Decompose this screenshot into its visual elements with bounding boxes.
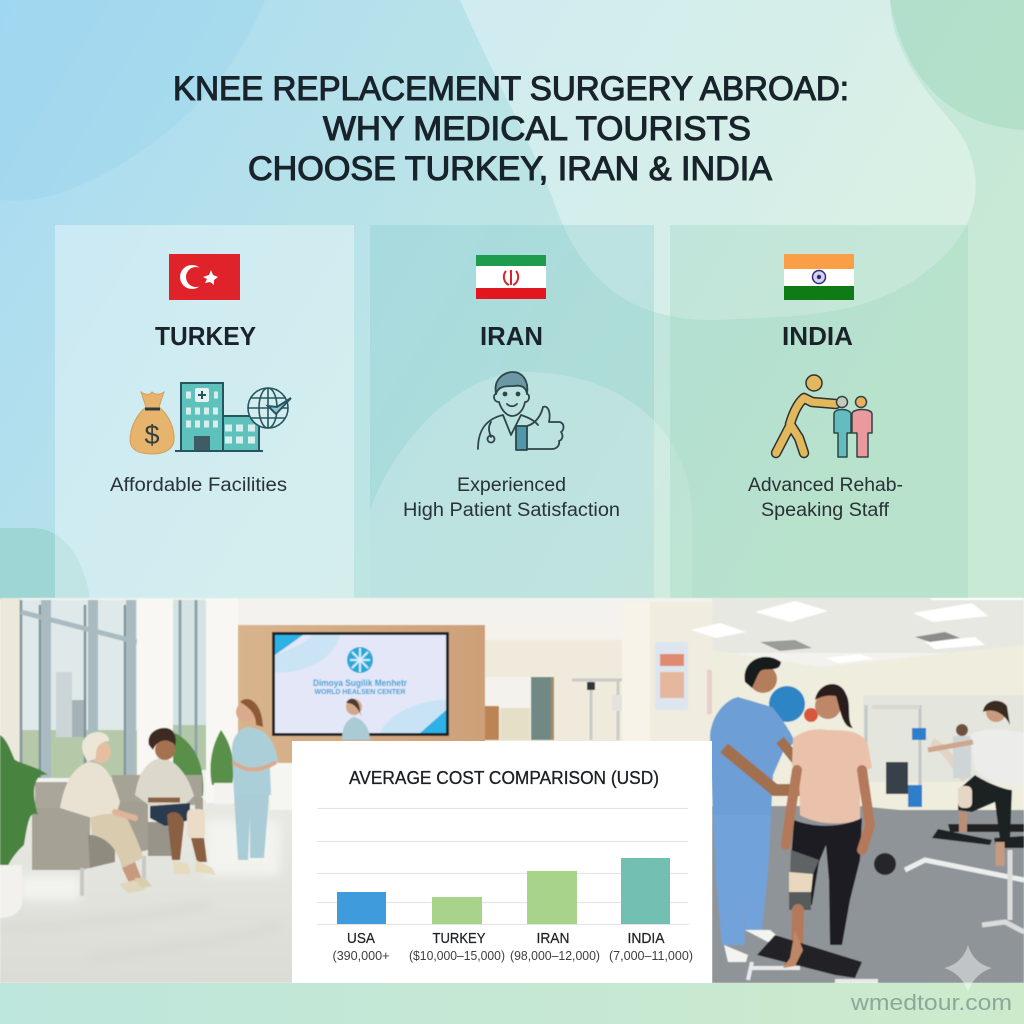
title: KNEE REPLACEMENT SURGERY ABROAD: xyxy=(173,70,849,108)
potted plant xyxy=(0,735,48,918)
patient xyxy=(786,684,872,965)
wood wall and reception xyxy=(238,625,485,765)
bar: Turkey xyxy=(432,897,482,924)
exercise benches xyxy=(905,824,1024,932)
back room xyxy=(485,602,731,743)
display screen: Dimoya Sugilik Menhetr xyxy=(313,678,407,688)
sofa xyxy=(32,775,203,896)
photo: hospital lobby and rehab gym xyxy=(0,598,1024,983)
axis labels: IRAN xyxy=(536,931,570,947)
icon: globe with check xyxy=(248,388,291,428)
caption: Turkey: Affordable Facilities xyxy=(110,475,287,496)
bar: India xyxy=(621,858,670,924)
heading: India: INDIA xyxy=(782,321,853,351)
panel: India xyxy=(670,225,968,598)
cost values xyxy=(332,949,693,963)
axis labels: USA xyxy=(347,931,375,947)
seated woman with bandaged knee xyxy=(135,728,216,875)
lobby windows xyxy=(0,598,238,803)
cost values: (390,000+ xyxy=(332,949,390,963)
flag: Turkey xyxy=(169,254,240,300)
step bench xyxy=(748,930,878,981)
icon: hospital xyxy=(175,383,263,451)
seated woman xyxy=(60,732,152,893)
icon: doctor thumbs up xyxy=(478,372,564,450)
exercise ball xyxy=(874,853,896,875)
lobby plants xyxy=(173,730,234,804)
lobby floor xyxy=(0,800,300,983)
icon: money bag: $ xyxy=(144,420,160,450)
panel: Turkey xyxy=(55,225,354,598)
back nurse xyxy=(342,699,370,740)
panel: Iran xyxy=(370,225,692,598)
caption: India: Advanced Rehab- xyxy=(748,475,903,496)
bar: USA xyxy=(337,892,386,924)
caption: India xyxy=(748,475,903,521)
title xyxy=(173,70,849,188)
axis labels: TURKEY xyxy=(432,931,486,947)
axis labels xyxy=(347,931,665,947)
title: CHOOSE TURKEY, IRAN & INDIA xyxy=(248,150,772,188)
display screen: WORLD HEALSEN CENTER xyxy=(314,689,406,696)
title: WHY MEDICAL TOURISTS xyxy=(323,110,751,148)
bar: Iran xyxy=(527,871,577,924)
display screen xyxy=(272,632,449,736)
gym woman exercising xyxy=(928,701,1024,866)
icon: rehab group xyxy=(776,375,872,457)
axis labels: INDIA xyxy=(628,931,665,947)
panel: cost comparison chart xyxy=(292,741,712,983)
caption: India: Speaking Staff xyxy=(761,500,890,521)
caption: Iran: High Patient Satisfaction xyxy=(403,500,620,521)
icon: money bag xyxy=(130,392,174,454)
caption: Iran xyxy=(403,475,620,521)
therapist xyxy=(710,657,800,962)
chart title: AVERAGE COST COMPARISON (USD) xyxy=(349,768,659,788)
watermark: wmedtour.com xyxy=(850,990,1012,1015)
cost values: (98,000–12,000) xyxy=(510,949,600,963)
icon: sparkle xyxy=(944,945,992,992)
flag: India xyxy=(784,254,854,300)
caption: Iran: Experienced xyxy=(457,475,566,496)
footer strip xyxy=(0,983,1024,1024)
heading: Iran: IRAN xyxy=(480,321,543,351)
heading: Turkey: TURKEY xyxy=(155,321,256,351)
cost values: (7,000–11,000) xyxy=(609,949,693,963)
grid lines xyxy=(317,808,689,924)
flag: Iran xyxy=(476,255,546,299)
cost values: ($10,000–15,000) xyxy=(409,949,505,963)
background xyxy=(0,0,1024,600)
gym room xyxy=(691,598,1024,983)
standing nurse xyxy=(232,699,278,868)
